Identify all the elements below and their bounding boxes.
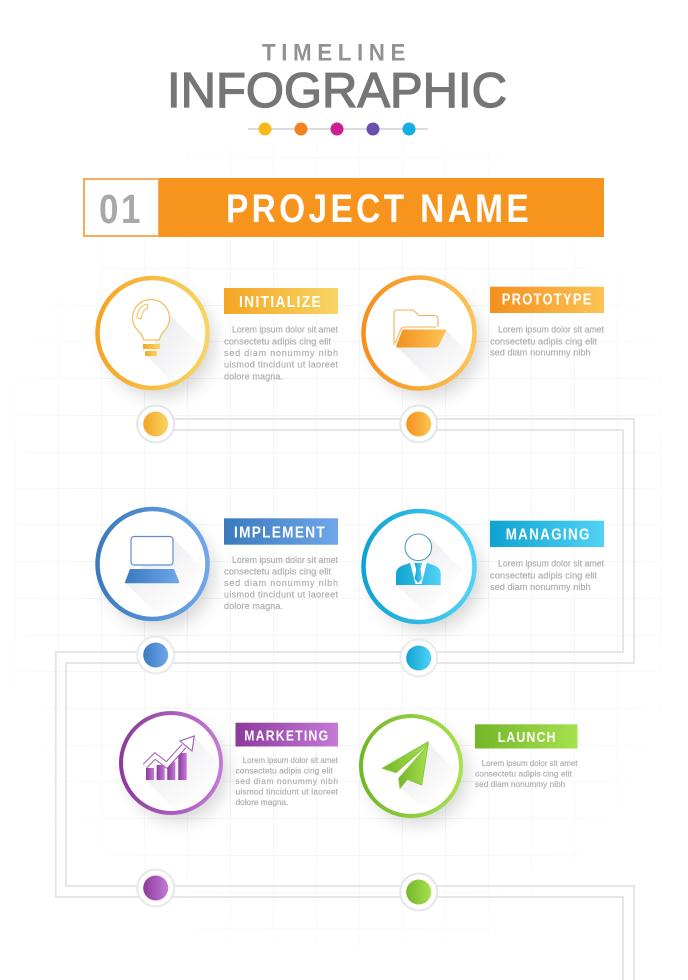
step: implement (98, 509, 338, 674)
project header bar (84, 178, 604, 237)
label: marketing: MARKETING (244, 728, 329, 744)
label: marketing (236, 723, 338, 746)
text block: sed diam nonummy nibh (490, 582, 591, 592)
number 01: 01 (99, 186, 143, 232)
label: managing (490, 521, 604, 547)
step: initialize (98, 278, 338, 442)
text block: uismod tincidunt ut laoreet (224, 360, 338, 370)
decorative dot row (248, 122, 428, 136)
text block: Lorem ipsum dolor sit amet (498, 325, 604, 335)
text block: Lorem ipsum dolor sit amet (498, 559, 604, 569)
node: implement (137, 636, 174, 674)
text block: Lorem ipsum dolor sit amet (232, 325, 338, 335)
text block: Lorem ipsum dolor sit amet (482, 758, 578, 768)
timeline connector lines (56, 419, 634, 980)
text block (236, 755, 339, 807)
text block: consectetu adipis cing elit (490, 337, 598, 347)
node: launch (400, 874, 437, 910)
text block: consectetu adipis cing elit (224, 567, 332, 577)
label: initialize: INITIALIZE (239, 294, 322, 311)
text block: consectetu adipis cing elit (236, 766, 333, 776)
text block: Lorem ipsum dolor sit amet (232, 555, 338, 565)
text block (224, 555, 338, 611)
label: initialize (224, 288, 338, 314)
text block: dolore magna. (224, 601, 283, 611)
text block: sed diam nonummy nibh (475, 779, 566, 789)
text block: Lorem ipsum dolor sit amet (243, 755, 339, 765)
node: initialize (137, 406, 174, 442)
node: prototype (400, 406, 437, 442)
text block: sed diam nonummy nibh (224, 348, 338, 358)
label: launch (475, 724, 578, 748)
step: prototype (364, 278, 604, 442)
text block: uismod tincidunt ut laoreet (224, 590, 338, 600)
heading: timeline: TIMELINE (262, 40, 411, 66)
step: launch (361, 716, 578, 910)
text block (490, 325, 604, 358)
text block (224, 325, 338, 381)
label: prototype: PROTOTYPE (502, 292, 593, 309)
text block: sed diam nonummy nibh (236, 776, 338, 786)
text block: consectetu adipis cing elit (490, 570, 598, 580)
icon: light bulb (132, 300, 170, 356)
label: implement (224, 518, 338, 545)
label: prototype (490, 287, 604, 313)
step: managing (364, 511, 604, 676)
text block: uismod tincidunt ut laoreet (236, 786, 339, 796)
text block: dolore magna. (224, 371, 283, 381)
icon: growth chart (145, 736, 194, 780)
title (167, 40, 507, 118)
text block (475, 758, 578, 789)
text block: consectetu adipis cing elit (475, 769, 572, 779)
icon: businessman (396, 534, 441, 585)
label: managing: MANAGING (506, 527, 591, 544)
icon: paper plane (382, 742, 428, 788)
step: marketing (121, 713, 339, 906)
label: launch: LAUNCH (498, 730, 557, 746)
text block: dolore magna. (236, 797, 288, 807)
heading: infographic: INFOGRAPHIC (167, 64, 507, 118)
icon: folder (394, 310, 446, 348)
label: implement: IMPLEMENT (234, 524, 326, 541)
project name: PROJECT NAME (226, 187, 532, 231)
text block: sed diam nonummy nibh (224, 578, 338, 588)
icon: laptop (125, 536, 179, 583)
node: managing (400, 640, 437, 676)
text block: sed diam nonummy nibh (490, 348, 591, 358)
text block: consectetu adipis cing elit (224, 336, 332, 346)
text block (490, 559, 604, 592)
node: marketing (137, 870, 174, 906)
